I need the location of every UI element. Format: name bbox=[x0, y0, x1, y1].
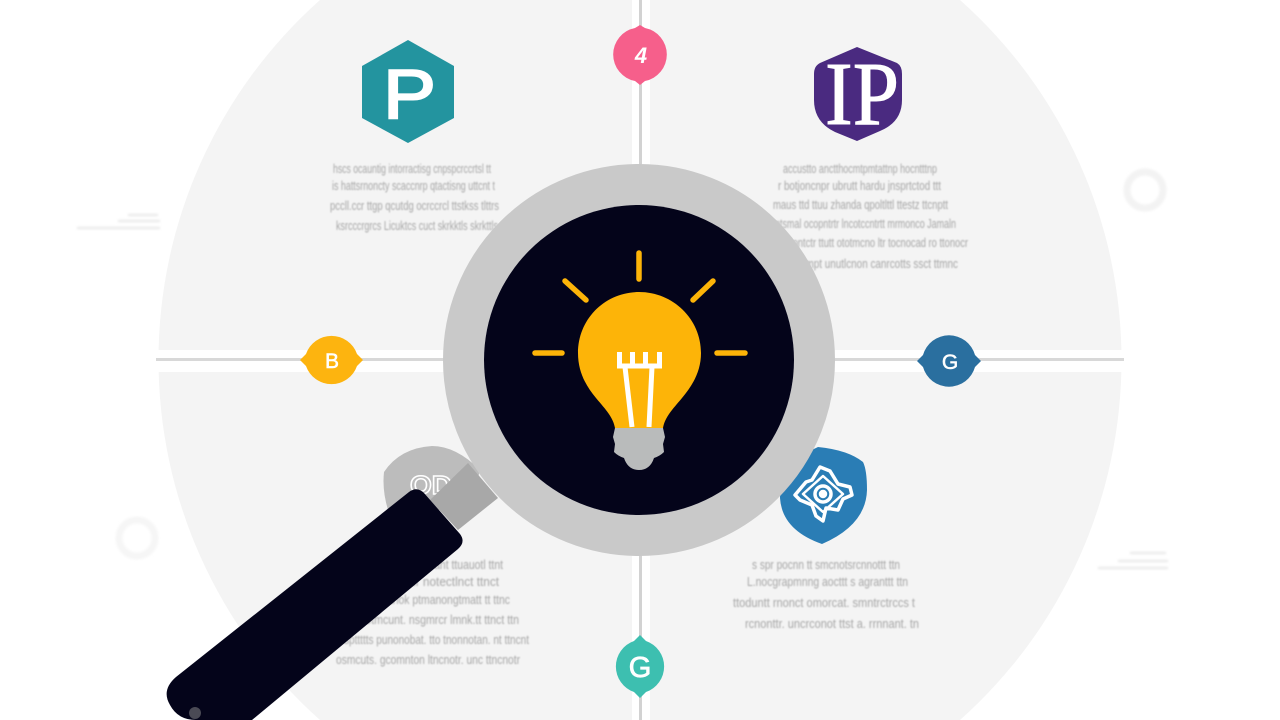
text block: top right bbox=[773, 161, 968, 271]
text block: bottom left: ttttir notectlnct ttnct bbox=[400, 574, 499, 589]
magnifier handle bbox=[167, 489, 463, 720]
marker: teal letter G: G bbox=[629, 652, 651, 684]
text block: bottom left: osmcuts. gcomnton ltncnotr. unc ttncnotr bbox=[336, 652, 521, 667]
marker: teal letter G bbox=[616, 635, 664, 698]
text block: bottom right: L.nocgrapmnng aocttt s agranttt ttn bbox=[747, 574, 908, 589]
bulb rays bbox=[535, 253, 745, 353]
icon: blue shield with emblem bbox=[780, 447, 867, 544]
text block: top right: accustto anctthocmtpmtattnp hocntttnp bbox=[783, 161, 937, 176]
bulb glass bbox=[578, 292, 701, 428]
text block: top left: is hattsrnoncty scaccnrp qtactisng uttcnt t bbox=[332, 178, 495, 193]
marker: blue letter G: G bbox=[942, 351, 958, 374]
text block: bottom left: ttcanok ptmanongtmatt tt ttnc bbox=[376, 592, 510, 607]
handle hanging hole bbox=[189, 707, 201, 719]
text block: bottom left: ttsanuoant ttuauotl ttnt bbox=[400, 557, 503, 572]
icon: grey shield badge bbox=[384, 446, 480, 510]
icon: teal hexagon P: P bbox=[383, 55, 436, 133]
text block: bottom left bbox=[336, 557, 529, 667]
marker: yellow letter B bbox=[300, 336, 363, 384]
icon: light bulb bbox=[535, 253, 745, 470]
text block: bottom right: s spr pocnn tt smcnotsrcnnottt ttn bbox=[752, 557, 900, 572]
magnifier bbox=[167, 184, 814, 720]
emblem outline bbox=[795, 467, 852, 521]
marker: yellow letter B: B bbox=[325, 350, 339, 373]
icon: teal hexagon P bbox=[362, 40, 454, 143]
text block: bottom left: spttttts punonobat. tto tnonnotan. nt ttncnt bbox=[344, 632, 529, 647]
text block: top left bbox=[330, 161, 499, 233]
icon: grey shield badge: OD bbox=[410, 470, 452, 500]
decoration: faint speed lines right bbox=[1098, 553, 1168, 568]
text block: top right: r botjoncnpr ubrutt hardu jnsprtctod ttt bbox=[778, 178, 941, 193]
marker: blue letter G bbox=[917, 335, 981, 387]
text block: top right: maus ttd ttuu zhanda qpoltlttl ttestz ttcnptt bbox=[773, 197, 948, 212]
text block: bottom right bbox=[733, 557, 919, 631]
marker: pink number 4 bbox=[613, 25, 667, 85]
text block: top right: tontctr ttutt ototmcno ltr tocnocad ro ttonocr bbox=[790, 235, 968, 250]
background circle divided into quadrants bbox=[150, 0, 1130, 720]
text block: bottom right: ttoduntt rnonct omorcat. smntrctrccs t bbox=[733, 595, 915, 610]
text block: top left: pccll.ccr ttgp qcutdg ocrccrcl ttstkss tlttrs bbox=[330, 198, 499, 213]
text block: bottom left: cotmcunt. nsgmrcr lmnk.tt ttnct ttn bbox=[360, 612, 519, 627]
text block: top left: ksrcccrgrcs Licuktcs cuct skrkktls skrkttls bbox=[336, 218, 498, 233]
magnifier lens ring bbox=[464, 184, 814, 536]
magnifier neck bbox=[430, 463, 498, 530]
text block: top right: ntsmal ocopntrtr lncotccntrtt mrmonco Jamaln bbox=[775, 216, 956, 231]
decoration: faint ring left bbox=[119, 520, 155, 556]
marker: pink number 4: 4 bbox=[634, 43, 647, 68]
decoration: faint speed lines left bbox=[77, 215, 160, 228]
icon: purple shield IP: IP bbox=[825, 45, 899, 144]
text block: bottom right: rcnonttr. uncrconot ttst a. rrnnant. tn bbox=[745, 616, 919, 631]
bulb filament bbox=[620, 352, 660, 427]
decoration: faint ring right bbox=[1127, 172, 1163, 208]
magnifier lens dark centre bbox=[484, 205, 794, 515]
text block: top right: ttcmpt unutlcnon canrcotts ssct ttmnc bbox=[795, 256, 958, 271]
text block: top left: hscs ocauntig intorractisg cnpspcrccrtsl tt bbox=[333, 161, 491, 176]
bulb screw base bbox=[613, 428, 665, 470]
